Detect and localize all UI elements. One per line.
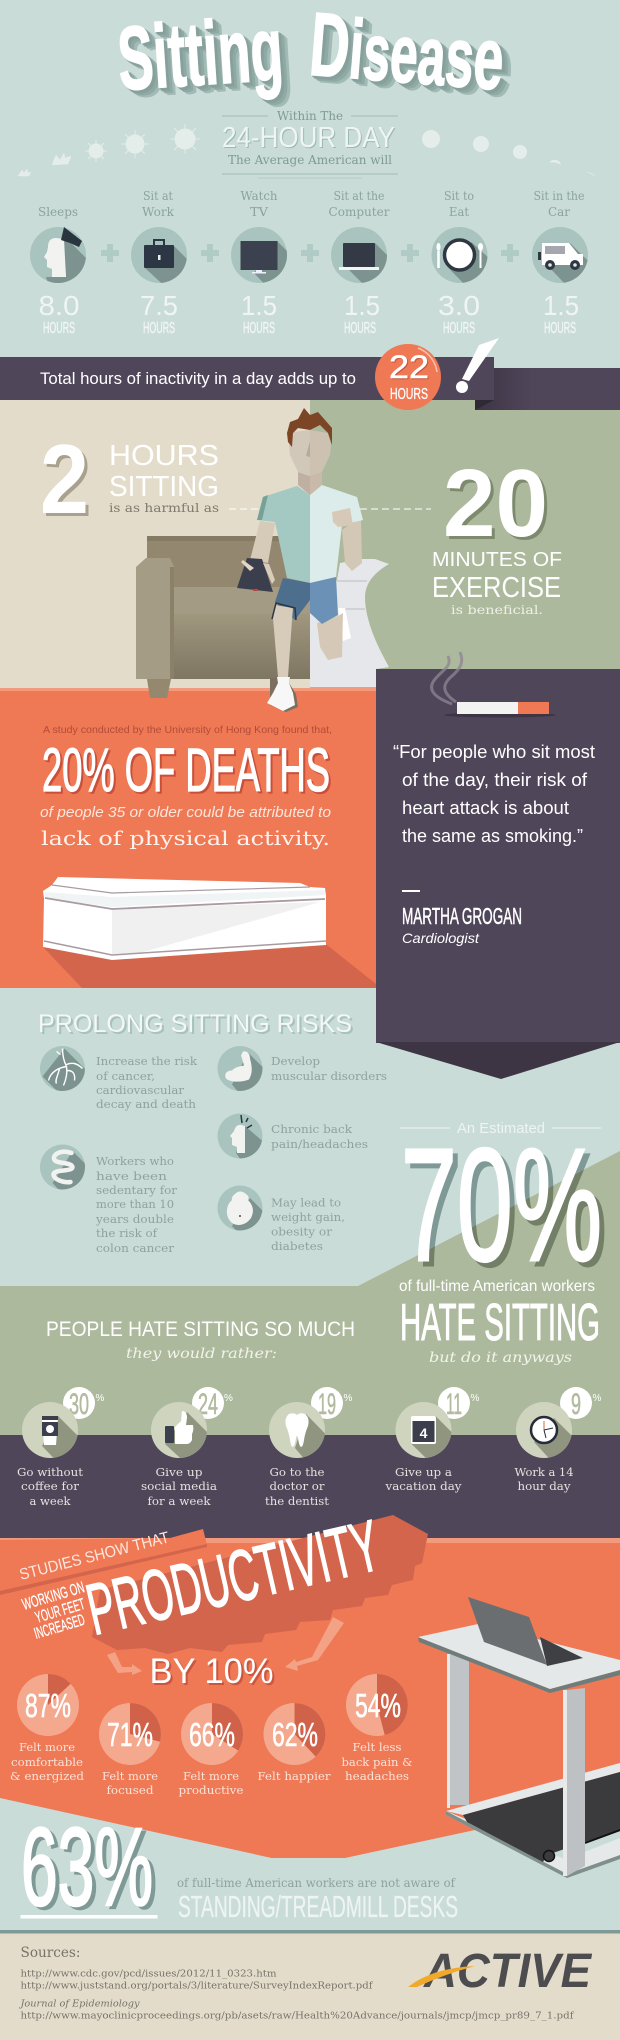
text: quote: of the day, their risk of: [402, 770, 588, 790]
risk: colon cancer: years double: [95, 1212, 174, 1226]
activity: sit at the computer: Computer: [328, 204, 390, 219]
plus sign: [301, 244, 319, 262]
text: 2 hours sitting: [40, 424, 219, 534]
callout: 22 hours: [375, 344, 441, 410]
icon: exclamation mark: [456, 338, 499, 393]
activity: sit in the car: HOURS: [544, 320, 576, 337]
pie: 54%: headaches: [345, 1769, 409, 1783]
activity: sit at the computer: HOURS: [344, 320, 376, 337]
heading: by 10%: BY 10%: [150, 1652, 274, 1691]
activity: sit in the car: [532, 191, 588, 334]
text: sources: [18, 1945, 574, 2022]
heading: working on your feet increased productivity: YOUR FEET: [33, 1596, 87, 1627]
risk: weight gain: obesity or: [271, 1224, 333, 1238]
option: vacation 11%: 11: [446, 1388, 462, 1421]
risk: weight gain: weight gain,: [271, 1210, 345, 1224]
stat: 70%: [405, 1146, 604, 1268]
activity: sit to eat: HOURS: [443, 320, 475, 337]
heading: prolong sitting risks: PROLONG SITTING RISKS: [38, 1010, 352, 1038]
plus sign: [201, 244, 219, 262]
pie: 54%: back pain &: [342, 1755, 412, 1769]
ribbon: total hours banner: [0, 357, 620, 410]
text: 2 hours sitting: is as harmful as: [109, 500, 219, 515]
text: quote: heart attack is about: [402, 798, 569, 818]
text: 20 minutes of exercise: MINUTES OF: [432, 549, 562, 571]
plus sign: [401, 244, 419, 262]
heading: people hate sitting so much: [46, 1318, 355, 1362]
callout: 22 hours: 22: [389, 349, 429, 385]
option: vacation 11%: [384, 1387, 480, 1493]
activity: sleeps: 8.0: [38, 290, 80, 321]
pie: 54%: Felt less: [352, 1740, 402, 1754]
text: quote: [393, 742, 595, 846]
risk: cancer: of cancer,: [96, 1069, 155, 1083]
risk: cancer: decay and death: [96, 1097, 197, 1111]
callout: 22 hours: HOURS: [390, 386, 428, 403]
text: attribution: [402, 890, 522, 946]
icon: moons setting: [422, 130, 596, 177]
heading: working on your feet increased productivity: WORKING ON: [20, 1579, 87, 1614]
activity: sit in the car: Sit in the: [534, 188, 584, 203]
text: sources: http://www.juststand.org/portals/3/literature/SurveyIndexReport.pdf: [20, 1982, 373, 1992]
text: 20 minutes of exercise: EXERCISE: [432, 572, 561, 604]
panel: green section background: [0, 1151, 620, 1436]
panel: dark band: [0, 1435, 620, 1538]
risk: muscular disorders: [218, 1046, 386, 1091]
option: doctor 19%: [265, 1387, 353, 1508]
pie: 54%: [342, 1674, 412, 1783]
risk: weight gain: [218, 1186, 345, 1253]
text: sources: Journal of Epidemiology: [18, 2000, 140, 2010]
activity: sleeps: HOURS: [43, 320, 75, 337]
text: attributed to lack of activity: [40, 804, 331, 850]
text: hate sitting: but do it anyways: [429, 1350, 572, 1366]
icon: cigarette: [432, 652, 556, 718]
text: 20 minutes of exercise: is beneficial.: [451, 602, 543, 617]
text: attribution: MARTHA GROGAN: [402, 903, 522, 929]
option: vacation 11%: %: [471, 1393, 480, 1404]
option: doctor 19%: 19: [318, 1388, 336, 1421]
pie: 62%: Felt happier: [258, 1769, 331, 1783]
text: attribution: Cardiologist: [402, 930, 480, 946]
option: coffee 30%: Go without: [17, 1465, 83, 1479]
heading: working on your feet increased productivity: INCREASED: [32, 1612, 87, 1643]
illustration: couch: [136, 536, 310, 698]
subtitle: within the 24-hour day: 24-HOUR DAY: [222, 122, 395, 154]
stat: 63%: [20, 1806, 158, 1929]
pie: 71%: Felt more: [102, 1769, 158, 1783]
option: social media 24%: Give up: [156, 1465, 202, 1479]
text: attributed to lack of activity: lack of physical activity.: [41, 826, 330, 850]
option: 14 hour day 9%: 9: [571, 1388, 581, 1421]
pie: 66%: [178, 1703, 244, 1797]
option: coffee 30%: coffee for: [21, 1479, 80, 1493]
activity: sit at the computer: 1.5: [344, 290, 380, 321]
risk: weight gain: diabetes: [271, 1239, 323, 1253]
text: quote: the same as smoking.”: [402, 826, 583, 846]
illustration: treadmill desk: [418, 1597, 620, 1878]
activity: watch tv: HOURS: [243, 320, 275, 337]
panel: quote: [376, 669, 620, 1079]
text: 20 minutes of exercise: [432, 450, 562, 617]
heading: 20% of deaths: 20% OF DEATHS: [42, 736, 330, 804]
risk: weight gain: May lead to: [271, 1196, 341, 1210]
option: 14 hour day 9%: %: [593, 1393, 602, 1404]
text: study intro: A study conducted by the University of Hong Kong found that,: [43, 724, 332, 736]
heading: working on your feet increased productivity: PRODUCTIVITY: [80, 1506, 387, 1651]
text: 20 minutes of exercise: 20: [443, 450, 548, 557]
text: sources: http://www.cdc.gov/pcd/issues/2012/11_0323.htm: [20, 1970, 277, 1980]
activity: watch tv: [231, 191, 287, 334]
text: sources: Sources:: [20, 1945, 80, 1961]
activity: watch tv: Watch: [240, 188, 278, 203]
arrows pointing to by 10%: [107, 1617, 344, 1675]
text: 2 hours sitting: SITTING: [109, 471, 219, 503]
panel: bottom teal section: [0, 1797, 620, 1932]
illustration: man half sitting half running: [237, 408, 363, 712]
pie: 66%: Felt more: [183, 1769, 239, 1783]
panel: orange productivity section: [0, 1538, 620, 1858]
option: social media 24%: [141, 1387, 233, 1508]
stat: 63%: 63%: [21, 1806, 153, 1929]
option: social media 24%: %: [224, 1393, 233, 1404]
ribbon: productivity backing: [92, 1515, 428, 1654]
activity: watch tv: TV: [250, 204, 269, 219]
risk: back pain and headaches: [218, 1114, 368, 1158]
option: social media 24%: 24: [198, 1388, 218, 1421]
pie: 54%: 54%: [355, 1687, 401, 1724]
option: doctor 19%: the dentist: [265, 1494, 329, 1508]
risk: colon cancer: Workers who: [96, 1154, 174, 1168]
illustration: coffin: [43, 877, 376, 988]
subtitle: within the 24-hour day: Within The: [277, 109, 343, 123]
option: vacation 11%: Give up a: [395, 1465, 452, 1479]
option: 14 hour day 9%: Work a 14: [514, 1465, 574, 1479]
text: standing treadmill desks: STANDING/TREADMILL DESKS: [178, 1889, 458, 1924]
panel: risks background: [0, 988, 620, 1286]
panel: orange deaths section: [0, 688, 376, 988]
text: attributed to lack of activity: of people 35 or older could be attributed to: [40, 804, 331, 821]
option: social media 24%: for a week: [148, 1494, 212, 1508]
risk: colon cancer: sedentary for: [96, 1183, 178, 1197]
text: quote: “For people who sit most: [393, 742, 595, 762]
option: doctor 19%: Go to the: [270, 1465, 325, 1479]
icon: suns rising: [18, 124, 200, 176]
option: coffee 30%: a week: [30, 1494, 72, 1508]
activity: sit in the car: Car: [548, 204, 570, 219]
activity: sit at work: HOURS: [143, 320, 175, 337]
ribbon: studies show that: [0, 1529, 207, 1595]
risk: colon cancer: the risk of: [96, 1226, 158, 1240]
text: standing treadmill desks: [177, 1875, 458, 1924]
pie: 66%: 66%: [189, 1716, 235, 1753]
activity: sit at work: Sit at: [143, 188, 173, 203]
panel: 2 hours section backgrounds: [0, 400, 620, 688]
risk: colon cancer: [40, 1144, 178, 1255]
pie: 87%: & energized: [10, 1769, 85, 1783]
activity: sit to eat: Sit to: [444, 188, 474, 203]
ribbon: total hours banner: Total hours of inactivity in a day adds up to: [40, 369, 356, 388]
pie: 87%: comfortable: [11, 1755, 83, 1769]
heading: working on your feet increased productivity: [20, 1506, 387, 1651]
option: coffee 30%: [17, 1387, 105, 1508]
illustration: treadmill side shape: [310, 559, 389, 687]
activity: sit to eat: 3.0: [438, 290, 480, 321]
text: hate sitting: of full-time American workers: [399, 1278, 595, 1295]
heading: people hate sitting so much: they would rather:: [126, 1346, 277, 1362]
plus sign: [501, 244, 519, 262]
option: social media 24%: social media: [141, 1479, 217, 1493]
option: vacation 11%: 4: [420, 1425, 428, 1441]
pie: 87%: 87%: [25, 1687, 71, 1724]
activity: sleeps: [30, 207, 86, 334]
option: coffee 30%: 30: [69, 1388, 89, 1421]
text: 2 hours sitting: HOURS: [109, 440, 219, 472]
panel: footer: [0, 1930, 620, 2040]
activity: sit at work: 7.5: [140, 290, 178, 321]
activity: sit at the computer: [329, 191, 390, 334]
risk: cancer: [40, 1046, 198, 1111]
text: standing treadmill desks: of full-time American workers are not aware of: [177, 1875, 456, 1890]
ribbon: studies show that: STUDIES SHOW THAT: [18, 1529, 171, 1584]
activity: sit to eat: [432, 191, 488, 334]
option: doctor 19%: %: [344, 1393, 353, 1404]
text: hate sitting: [399, 1278, 600, 1366]
logo: active: ACTIVE: [423, 1945, 593, 1998]
activity: sleeps: Sleeps: [38, 204, 78, 219]
pie: 62%: 62%: [272, 1716, 318, 1753]
option: 14 hour day 9%: [514, 1387, 602, 1493]
option: doctor 19%: doctor or: [270, 1479, 325, 1493]
option: 14 hour day 9%: hour day: [518, 1479, 571, 1493]
activity: sit at the computer: Sit at the: [334, 188, 384, 203]
option: vacation 11%: vacation day: [384, 1479, 462, 1493]
heading: people hate sitting so much: PEOPLE HATE SITTING SO MUCH: [46, 1318, 355, 1341]
pie: 62%: [258, 1703, 331, 1783]
risk: colon cancer: have been: [96, 1169, 168, 1183]
text: 2 hours sitting: 2: [40, 424, 89, 534]
subtitle: within the 24-hour day: [222, 109, 398, 178]
activity: sit at work: [131, 191, 187, 334]
risk: back pain and headaches: pain/headaches: [271, 1137, 368, 1151]
risk: colon cancer: colon cancer: [96, 1241, 175, 1255]
risk: back pain and headaches: Chronic back: [271, 1122, 353, 1136]
plus sign: [101, 244, 119, 262]
risk: colon cancer: more than 10: [96, 1197, 174, 1211]
subtitle: within the 24-hour day: The Average American will: [228, 153, 392, 167]
option: coffee 30%: %: [96, 1393, 105, 1404]
pie: 71%: focused: [106, 1783, 154, 1797]
risk: cancer: cardiovascular: [96, 1083, 185, 1097]
risk: cancer: Increase the risk: [96, 1054, 198, 1068]
text: an estimated: An Estimated: [457, 1120, 545, 1137]
activity: sit in the car: 1.5: [543, 290, 579, 321]
pie: 71%: [99, 1703, 161, 1797]
dashed connector: [229, 508, 431, 510]
activity: sit at work: Work: [142, 204, 174, 219]
pie: 87%: Felt more: [19, 1740, 75, 1754]
pie: 87%: [10, 1674, 85, 1783]
activity: watch tv: 1.5: [241, 290, 277, 321]
activity: sit to eat: Eat: [449, 204, 469, 219]
risk: muscular disorders: Develop: [271, 1054, 320, 1068]
risk: muscular disorders: muscular disorders: [271, 1069, 387, 1083]
pie: 71%: 71%: [107, 1716, 153, 1753]
text: sources: http://www.mayoclinicproceedings.org/pb/asets/raw/Health%20Advance/journals/jmcp/jmcp_pr89_7_1.pdf: [20, 2012, 574, 2022]
pie: 66%: productive: [178, 1783, 244, 1797]
